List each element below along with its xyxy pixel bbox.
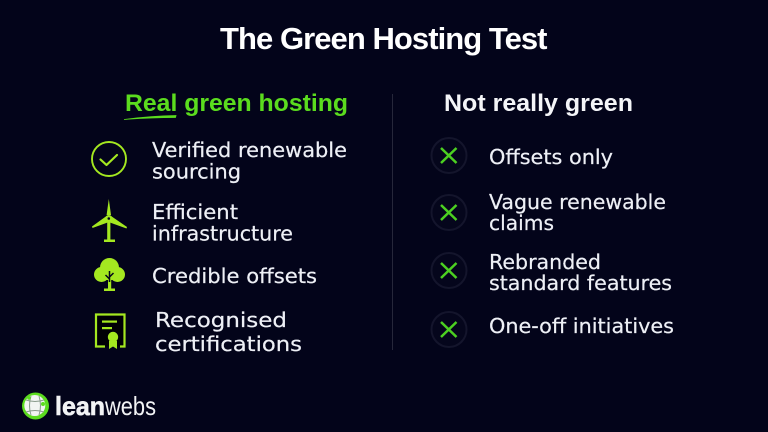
icon: cross: [432, 195, 466, 230]
icon: cross: [432, 253, 466, 288]
logo: leanwebs: [22, 391, 156, 421]
text: one-off initiatives: One-off initiatives: [489, 314, 674, 338]
icon: cross: [432, 138, 466, 173]
row: recognised certifications: [96, 308, 302, 356]
text: verified renewable sourcing: [152, 138, 347, 184]
text: rebranded standard features: standard features: [489, 271, 672, 295]
text: recognised certifications: certifications: [155, 332, 302, 356]
text: vague renewable claims: claims: [489, 211, 554, 235]
row: vague renewable claims: [432, 190, 666, 235]
text: efficient infrastructure: infrastructure: [152, 222, 293, 246]
heading: not really green: Not really green: [444, 90, 633, 117]
row: one-off initiatives: [432, 312, 674, 347]
row: efficient infrastructure: [92, 199, 293, 246]
wordmark: lean: [55, 391, 105, 421]
text: rebranded standard features: [489, 250, 672, 295]
text: vague renewable claims: [489, 190, 666, 235]
text: offsets only: Offsets only: [489, 145, 613, 169]
row: verified renewable sourcing: [92, 138, 347, 184]
text: efficient infrastructure: [152, 200, 293, 246]
text: rebranded standard features: Rebranded: [489, 250, 601, 274]
title: The Green Hosting Test: [220, 21, 548, 56]
row: credible offsets: [94, 258, 317, 291]
panel: not really green: [432, 90, 674, 347]
icon: tree: [94, 258, 125, 291]
icon: check circle: [92, 142, 126, 176]
wordmark: webs: [104, 391, 156, 421]
text: verified renewable sourcing: Verified renewable: [152, 138, 347, 162]
icon: wind turbine: [92, 199, 127, 242]
row: rebranded standard features: [432, 250, 672, 295]
text: efficient infrastructure: Efficient: [152, 200, 238, 224]
panel: real green hosting: [92, 90, 348, 356]
wordmark: [55, 391, 156, 421]
row: offsets only: [432, 138, 613, 173]
text: recognised certifications: Recognised: [155, 308, 287, 332]
icon: cross: [432, 312, 466, 347]
icon: globe: [22, 392, 49, 420]
icon: certificate: [96, 314, 124, 349]
text: verified renewable sourcing: sourcing: [152, 160, 241, 184]
text: recognised certifications: [155, 308, 302, 356]
text: credible offsets: Credible offsets: [152, 264, 317, 288]
text: vague renewable claims: Vague renewable: [489, 190, 666, 214]
heading: real green hosting: Real green hosting: [125, 90, 348, 117]
